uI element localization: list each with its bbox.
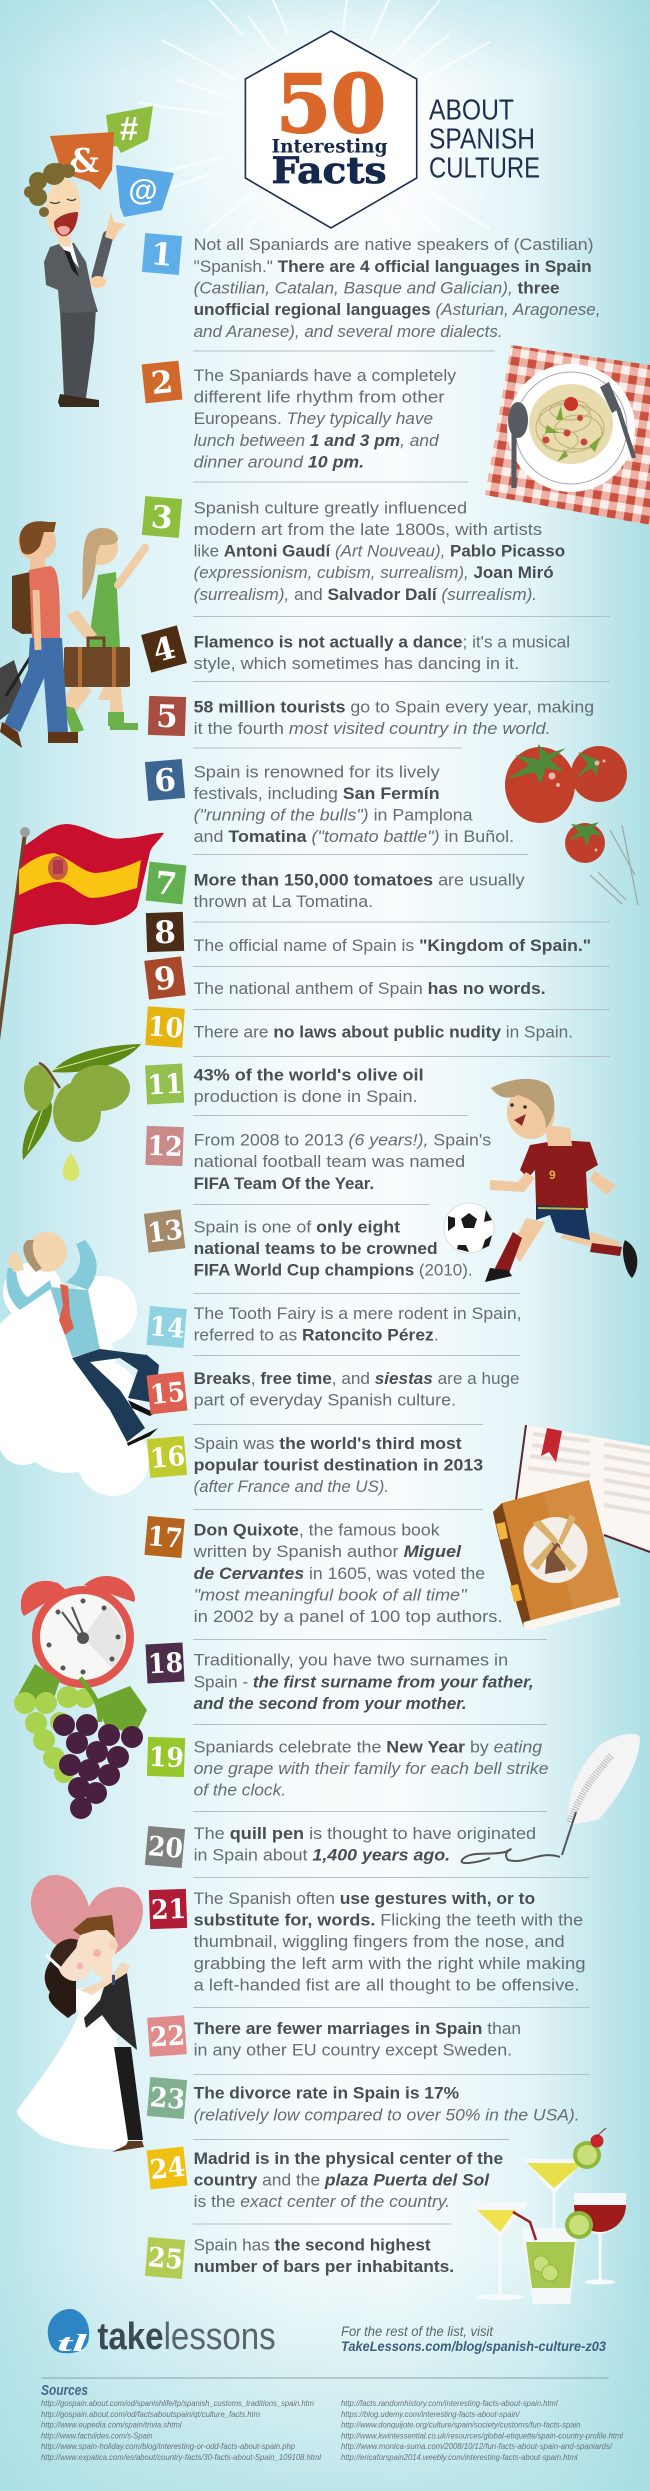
fact 9 text: The national anthem of Spain has no words. [194,979,546,998]
fact 11 text: production is done in Spain. [194,1087,418,1106]
badge 25: 25 [147,2242,184,2276]
fact 22 text: There are fewer marriages in Spain than [194,2019,521,2038]
fact 25 text: number of bars per inhabitants. [194,2257,454,2276]
fact 21 text: The Spanish often use gestures with, or to [194,1889,535,1908]
badge 3: 3 [150,499,174,537]
fact 17 text: in 2002 by a panel of 100 top authors. [194,1607,503,1626]
badge 12: 12 [147,1131,183,1163]
badge 5 [148,696,186,736]
fact 1 text: (Castilian, Catalan, Basque and Galician), three [194,278,560,298]
illustration: tomatoes [505,744,638,905]
sources list right: http://facts.randomhistory.com/interesting-facts-about-spain.html [341,2399,558,2408]
sources list right: http://www.kwintessential.co.uk/resources/global-etiquette/spain-country-profile.html [341,2432,623,2440]
fact 23 text: (relatively low compared to over 50% in the USA). [194,2106,580,2124]
badge 1: 1 [150,236,174,274]
fact 16 text: popular tourist destination in 2013 [194,1456,483,1474]
fact 13 [144,1209,473,1280]
fact 14 text: The Tooth Fairy is a mere rodent in Spain, [194,1304,522,1323]
fact 2 text: dinner around 10 pm. [194,452,364,472]
fact 5 text [194,698,594,738]
fact 4 text: Flamenco is not actually a dance; it's a musical [194,632,570,652]
fact 24 [147,2147,503,2211]
fact 6 text [194,762,514,846]
fact 10 [145,1006,573,1048]
badge 6 [145,759,185,801]
fact 17 text [193,1520,503,1626]
sources list left: http://www.expatica.com/es/about/country-facts/30-facts-about-Spain_109108.html [41,2453,321,2462]
badge 10: 10 [147,1011,184,1045]
fact 19 text [194,1738,549,1800]
fact 13 text: national teams to be crowned [194,1239,438,1258]
fact 4 [141,625,570,673]
logo: takelessons: takelessons [97,2316,276,2358]
sources list right: http://www.monica-suma.com/2008/10/12/fun-facts-about-spain-and-spaniards/ [341,2442,613,2451]
badge 17: 17 [146,1521,184,1555]
fact 25 text [194,2236,454,2276]
badge 7: 7 [153,865,179,903]
fact 24 text: is the exact center of the country. [194,2192,450,2211]
fact 20 text: in Spain about 1,400 years ago. [194,1846,450,1864]
fact 16 text [194,1434,483,1496]
fact 16 [147,1434,483,1496]
badge 18: 18 [147,1648,184,1680]
subtitle: ABOUT [429,94,514,126]
badge 13: 13 [146,1214,184,1249]
fact 21 text: substitute for, words. Flicking the teeth with the [194,1910,583,1930]
illustration: travelling couple [0,521,145,748]
fact 4 text: style, which sometimes has dancing in it. [194,654,519,673]
fact 21 [149,1889,586,1994]
fact 6 text: ("running of the bulls") in Pamplona [194,806,473,824]
fact 3 text: (surrealism), and Salvador Dalí (surrealism). [194,585,537,604]
illustration: laughing man in suit [24,163,126,407]
title word Facts: Facts [272,150,386,192]
fact 3 text: Spanish culture greatly influenced [194,498,467,518]
fact 14 text [194,1304,522,1344]
fact 16 text: Spain was the world's third most [194,1434,462,1453]
fact 4 text [194,632,570,673]
fact 17 [144,1516,503,1626]
fact 24 text [194,2149,503,2211]
fact 2 text [194,366,457,472]
icon: soccer ball [444,1203,494,1253]
fact 16 text: (after France and the US). [194,1477,389,1496]
fact 21 text [194,1889,586,1994]
illustration: pasta plate on checkered cloth [485,345,650,525]
fact 22 text: in any other EU country except Sweden. [194,2040,512,2060]
fact 15 text [194,1369,520,1410]
fact 3 text [194,498,565,604]
illustration: grapes [14,1664,147,1819]
title hexagon [245,31,417,228]
fact 13 text: Spain is one of only eight [194,1218,400,1236]
sources list right: http://www.donquijote.org/culture/spain/society/customs/fun-facts-spain [341,2420,581,2430]
illustration: speech bubbles: & [69,141,99,180]
badge 7 [146,862,186,904]
fact 2 text: Europeans. They typically have [194,409,433,428]
badge 22: 22 [149,2020,186,2054]
badge 2 [142,361,182,403]
fact 7 text: More than 150,000 tomatoes are usually [194,870,525,890]
badge 20: 20 [147,1831,184,1865]
fact 23 [147,2077,580,2124]
sources list left [41,2399,321,2462]
illustration: speech bubbles: @ [128,174,158,207]
badge 11: 11 [147,1069,183,1101]
fact 18 text: and the second from your mother. [194,1694,467,1713]
fact 1 text: and Aranese), and several more dialects. [194,322,503,341]
fact 15 [147,1369,520,1414]
badge 2: 2 [149,364,175,402]
badge 9: 9 [152,960,178,998]
badge 9 [144,956,186,1000]
fact 23 text: The divorce rate in Spain is 17% [194,2084,459,2102]
sources list left: http://gospain.about.com/od/factsaboutspain/qt/culture_facts.htm [41,2410,260,2419]
fact 7 text [194,870,525,911]
fact 6 text: Spain is renowned for its lively [194,762,440,782]
fact 19 text: Spaniards celebrate the New Year by eating [194,1738,543,1756]
fact 1 text: Not all Spaniards are native speakers of (Castilian) [194,235,594,254]
fact 20 text [194,1824,536,1864]
fact 5 [148,696,594,738]
badge 15: 15 [149,1377,187,1411]
fact 19 text: one grape with their family for each bell strike [194,1759,549,1778]
fact 15 text: part of everyday Spanish culture. [194,1390,456,1410]
fact 3 text: like Antoni Gaudí (Art Nouveau), Pablo Picasso [194,542,565,560]
fact 25 text: Spain has the second highest [194,2236,431,2254]
badge 16: 16 [149,1441,186,1475]
fact 21 text: a left-handed fist are all thought to be offensive. [194,1976,580,1994]
badge 14: 14 [148,1311,186,1345]
fact 2 text: different life rhythm from other [194,388,445,406]
fact 9 [144,956,546,1000]
fact 17 text: written by Spanish author Miguel [193,1542,462,1561]
fact 3 [142,496,565,604]
badge 4: 4 [149,630,179,670]
badge 4 [141,625,187,673]
fact 22 text [194,2019,521,2060]
fact 18 text: Traditionally, you have two surnames in [194,1650,508,1670]
fact 24 text: country and the plaza Puerta del Sol [194,2170,490,2190]
fact 8 text: The official name of Spain is "Kingdom of Spain." [194,936,591,955]
fact 8 [146,912,591,955]
subtitle: SPANISH [429,124,535,156]
fact 5 text: 58 million tourists go to Spain every year, making [194,698,594,716]
illustration: cocktails [470,2128,626,2304]
fact 7 [146,862,525,911]
illustration: alarm clock [21,1576,135,1688]
illustration: daydreamer on a cloud [0,1232,159,1496]
fact 21 text: grabbing the left arm with the right while making [194,1954,586,1973]
fact 12 text: From 2008 to 2013 (6 years!), Spain's [194,1130,491,1150]
logo: takelessons [48,2309,276,2358]
fact 6 [145,759,514,846]
fact 14 text: referred to as Ratoncito Pérez. [194,1326,439,1344]
call to action: For the rest of the list, visit [341,2324,494,2339]
badge 5: 5 [156,699,178,735]
illustration: olives and oil [22,1044,141,1181]
sources list right: https://blog.udemy.com/interesting-facts-about-spain/ [341,2410,520,2419]
fact 17 text: de Cervantes in 1605, was voted the [194,1564,485,1583]
fact 12 text [194,1130,491,1193]
fact 12 [145,1126,491,1193]
fact 1 text: unofficial regional languages (Asturian, Aragonese, [194,300,601,319]
sources list left: http://www.eupedia.com/spain/trivia.shtml [41,2420,182,2430]
fact 25 [145,2236,454,2279]
fact 1 [142,233,601,341]
fact 15 text: Breaks, free time, and siestas are a huge [194,1369,520,1388]
fact 20 [145,1824,536,1868]
fact 18 text: Spain - the first surname from your father, [194,1672,534,1692]
fact 1 text [194,235,601,341]
sources list right: http://ericaforspain2014.weebly.com/interesting-facts-about-spain.html [341,2453,578,2462]
badge 21: 21 [151,1894,187,1926]
fact 18 [146,1643,534,1713]
fact 2 [142,361,457,472]
fact 19 [147,1737,549,1800]
fact 14 [147,1304,522,1348]
fact 13 text [194,1218,473,1280]
badge 8: 8 [154,915,176,951]
illustration: speech bubbles: # [120,110,138,147]
fact 2 text: lunch between 1 and 3 pm, and [194,431,439,450]
fact 7 text: thrown at La Tomatina. [194,892,373,911]
fact 5 text: it the fourth most visited country in the world. [194,719,551,738]
fact 10 text: There are no laws about public nudity in Spain. [194,1022,573,1042]
illustration: speech bubbles [50,106,174,217]
fact 21 text: thumbnail, wiggling fingers from the nose, and [194,1932,565,1951]
sources list left: http://www.spain-holiday.com/blog/interesting-or-odd-facts-about-spain.php [41,2442,296,2451]
title word Interesting: Interesting [272,136,388,158]
fact 6 text: festivals, including San Fermín [194,784,440,803]
sources list left: http://www.factslides.com/s-Spain [41,2432,153,2440]
badge 6: 6 [153,762,177,800]
fact 13 text: FIFA World Cup champions (2010). [194,1260,473,1280]
subtitle [429,94,540,184]
sources heading: Sources [41,2382,88,2399]
illustration: kissing wedding couple [17,1875,144,2152]
illustration: books [493,1425,650,1630]
fact 22 [147,2015,521,2060]
fact 24 text: Madrid is in the physical center of the [194,2149,503,2168]
fact 6 text: and Tomatina ("tomato battle") in Buñol. [194,827,514,846]
fact 11 text [194,1066,424,1106]
fact 2 text: The Spaniards have a completely [194,366,457,385]
fact 12 text: national football team was named [194,1152,465,1171]
illustration: quill and ink scribble [462,1734,640,1863]
badge 8 [146,912,184,952]
sources list right [341,2399,623,2462]
logo: takelessons: tl [57,2331,88,2357]
fact 17 text: Don Quixote, the famous book [194,1520,440,1540]
badge 3 [142,496,182,538]
illustration: football player: 9 [549,1168,556,1182]
call to action [341,2324,606,2354]
fact 17 text: "most meaningful book of all time" [194,1586,468,1604]
badge 24: 24 [149,2152,187,2186]
illustration: football player [485,1079,637,1282]
badge 23: 23 [149,2082,186,2116]
fact 20 text: The quill pen is thought to have originated [194,1824,536,1843]
fact 12 text: FIFA Team Of the Year. [194,1174,374,1193]
fact 11 [145,1064,424,1106]
fact 18 text [194,1650,534,1713]
call to action: TakeLessons.com/blog/spanish-culture-z03 [341,2338,606,2354]
sources list left: http://gospain.about.com/od/spanishlife/tp/spanish_customs_traditions_spain.htm [41,2399,314,2408]
badge 1 [142,233,182,275]
fact 11 text: 43% of the world's olive oil [194,1066,424,1084]
title number 50: 50 [276,57,386,151]
fact 3 text: modern art from the late 1800s, with artists [194,520,542,539]
sunburst rays [139,0,521,280]
fact 19 text: of the clock. [194,1780,286,1800]
fact 3 text: (expressionism, cubism, surrealism), Joan Miró [194,563,554,582]
subtitle: CULTURE [429,152,540,184]
badge 19: 19 [148,1742,184,1774]
illustration: Spanish flag [0,824,164,1040]
fact 23 text [194,2084,580,2124]
fact 1 text: "Spanish." There are 4 official languages in Spain [194,257,592,276]
